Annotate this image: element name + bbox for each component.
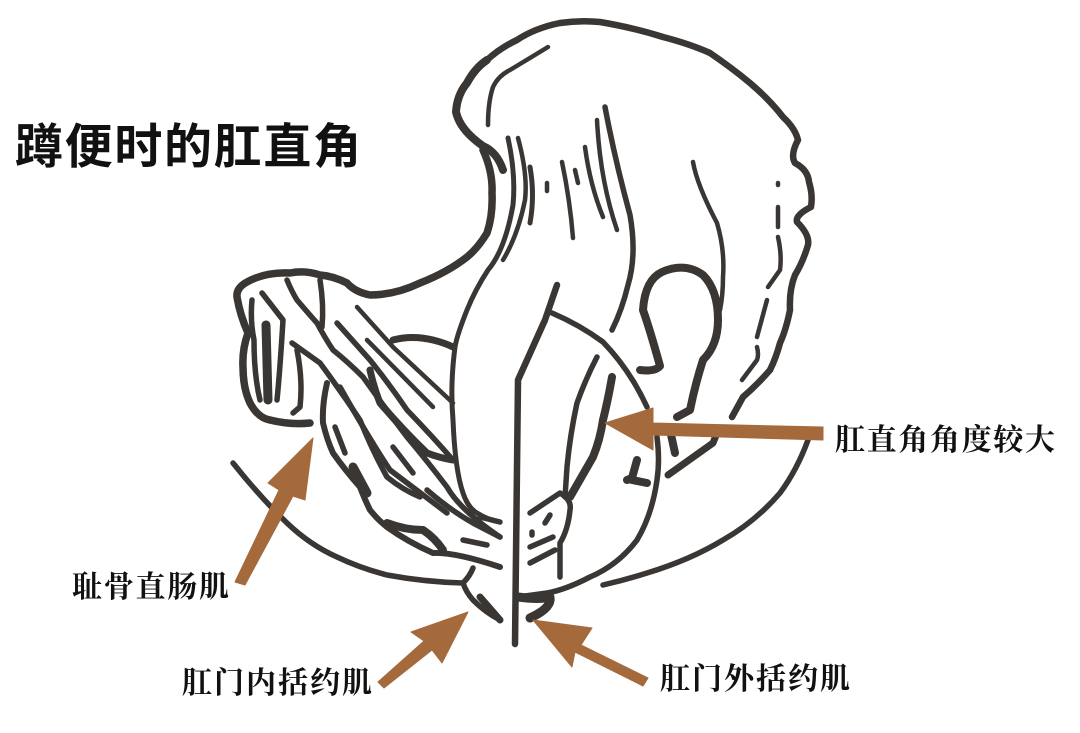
lower left arc — [233, 463, 500, 620]
arrows — [235, 408, 823, 688]
arrow: anorectal angle — [605, 408, 823, 450]
arrow: puborectalis — [235, 438, 313, 585]
label: puborectalis: 耻骨直肠肌 — [72, 571, 229, 604]
anatomical drawing — [233, 21, 812, 644]
inner pelvic floor strands — [518, 357, 717, 618]
arrow: internal anal sphincter — [378, 612, 468, 688]
sacrum outer contour — [237, 21, 812, 424]
arrow: external anal sphincter — [533, 620, 648, 686]
sacrum inner lines — [452, 47, 781, 522]
label: external anal sphincter: 肛门外括约肌 — [660, 663, 850, 696]
ischial notch hook — [640, 268, 718, 417]
levator muscle strands — [287, 280, 500, 620]
rectum and anal canal wall — [515, 285, 658, 644]
title: 蹲便时的肛直角 — [15, 121, 361, 174]
label: internal anal sphincter: 肛门内括约肌 — [182, 667, 372, 700]
pubic bone inner lines — [251, 293, 283, 400]
label: larger anorectal angle: 肛直角角度较大 — [835, 423, 1055, 457]
lower right arc — [603, 440, 808, 585]
